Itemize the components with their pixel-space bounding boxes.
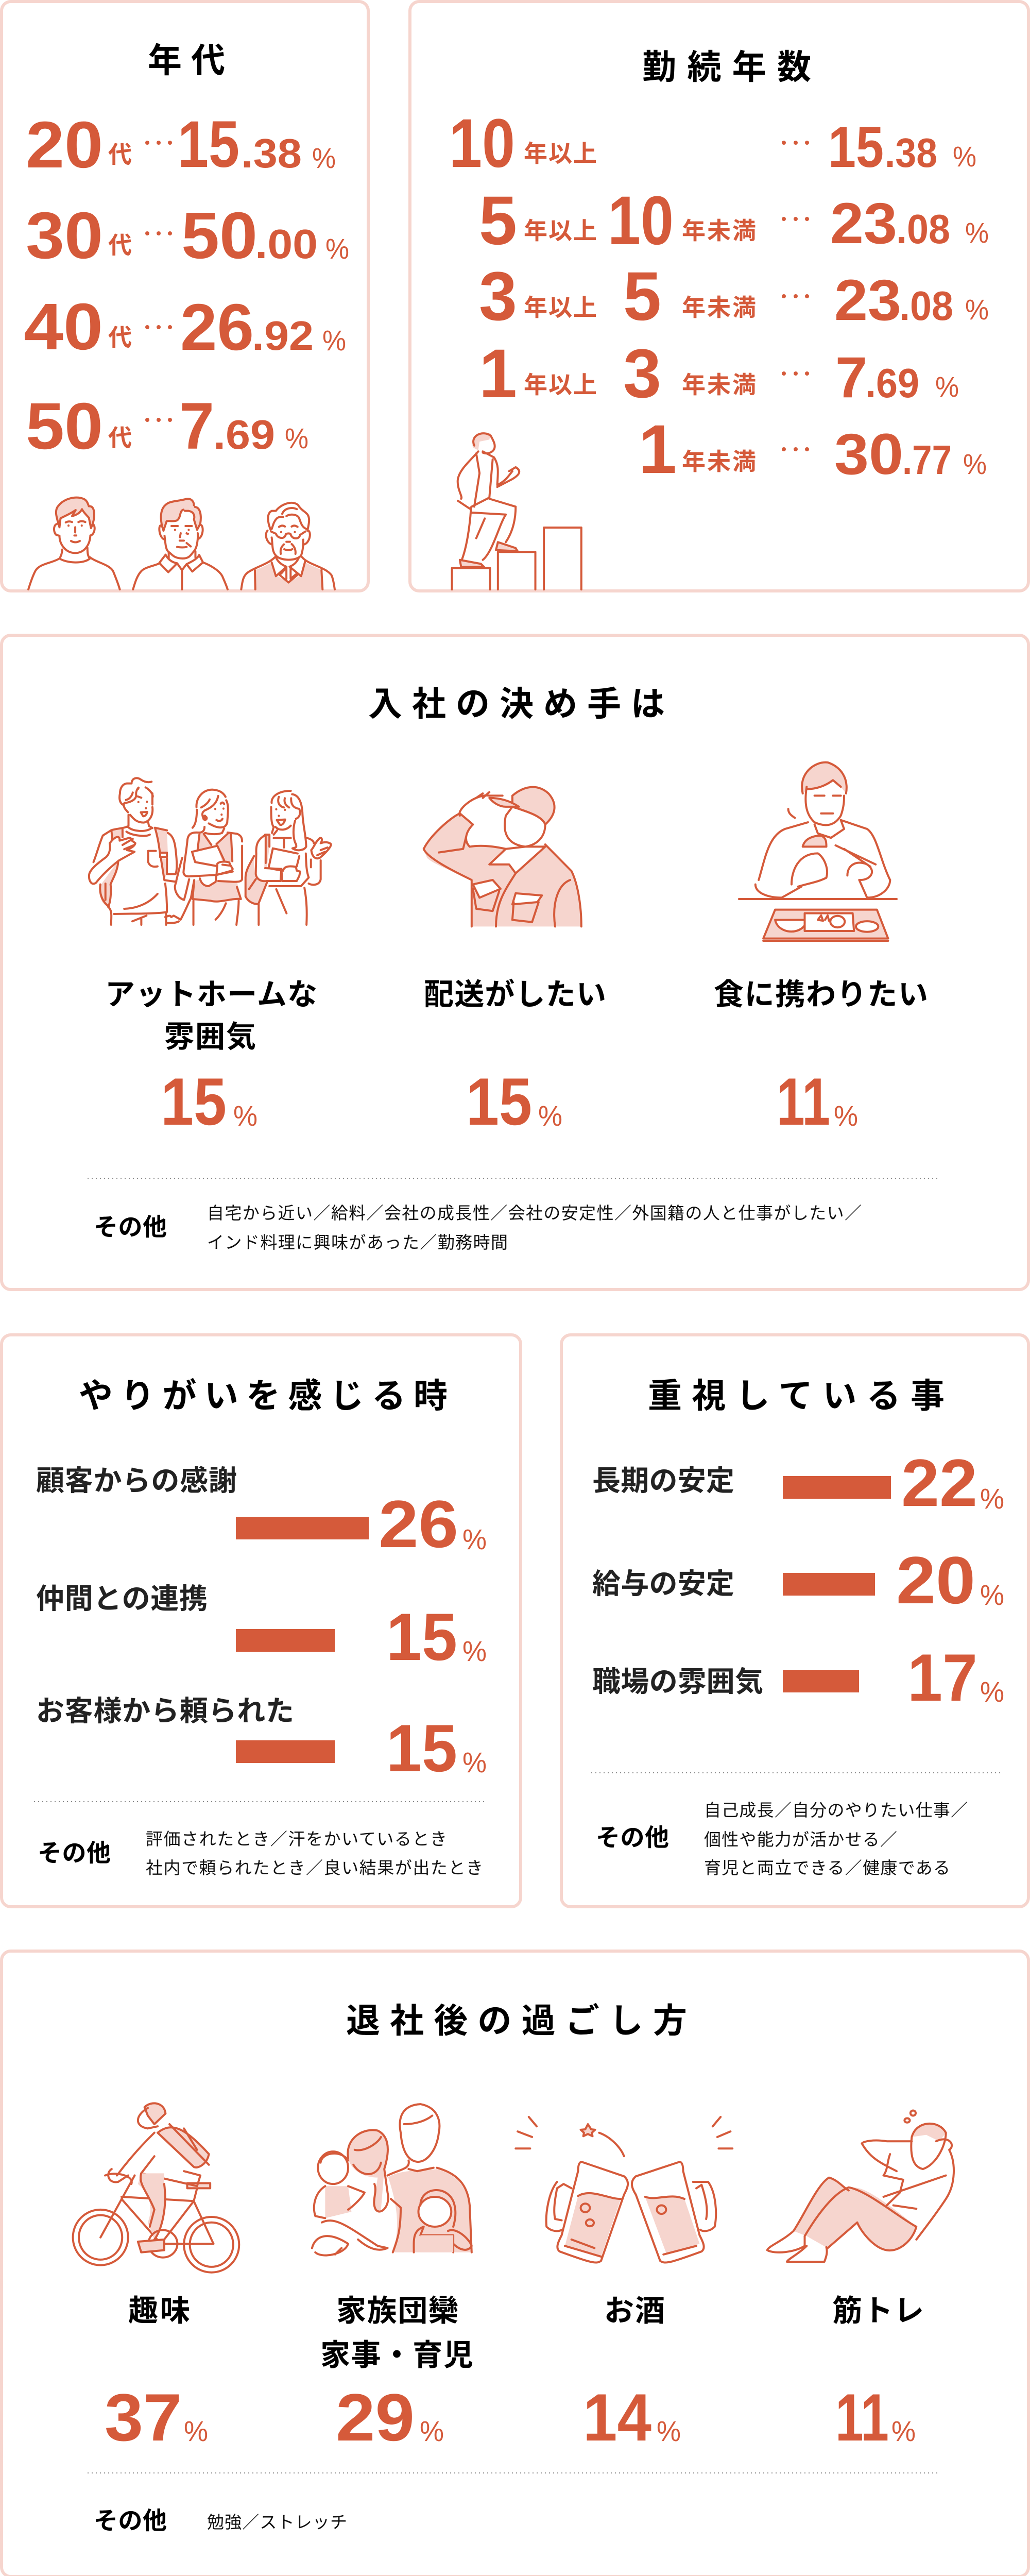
row: 5 to 10 years: 5 [479,182,517,259]
row: 20s: 代 [108,141,132,168]
icon: three coworkers [89,778,331,925]
row: 1 to 3 years: 1 [479,335,517,412]
label: drinking: お酒 [604,2294,665,2328]
heading: rewarding moments: やりがいを感じる時 [79,1377,448,1415]
row: long term stability: 22 [901,1445,977,1520]
others: after work: その他 [94,2507,167,2534]
row: under 1 year: 30 [834,422,903,486]
row: 10 years or more: % [953,140,976,173]
row: workplace atmosphere: 17 [907,1640,977,1715]
row: 10 years or more: 10 [449,105,515,182]
row: long term stability: % [980,1482,1004,1515]
others: deciding factor: その他 [94,1213,167,1241]
row: 3 to 5 years: .08 [899,283,953,329]
row: 10 years or more: 15 [828,115,884,179]
row: teamwork: 仲間との連携 [36,1583,208,1615]
row: long term stability: 長期の安定 [592,1465,734,1497]
others: priorities: 自己成長／自分のやりたい仕事／ [704,1801,968,1820]
row: relied on by customers [36,1695,487,1786]
stat: 14%: 14 [583,2380,651,2455]
row: 5 to 10 years: % [965,216,989,249]
row: thanks from customers [36,1465,487,1562]
row: 5 to 10 years: .08 [896,206,950,252]
row: 3 to 5 years: % [965,293,989,326]
label: delivery: 配送がしたい [424,978,606,1011]
icon: delivery worker [424,787,581,926]
row: 50s: 代 [108,425,132,451]
others: deciding factor: 自宅から近い／給料／会社の成長性／会社の安定性／外国籍の人と仕事がしたい／ [207,1204,862,1223]
heading: after work: 退社後の過ごし方 [346,2002,687,2040]
row: 20s: % [312,142,336,174]
stat: 15%: 15 [161,1064,227,1139]
row: relied on by customers: % [462,1746,487,1778]
row: 10 years or more: 年以上 [524,140,597,167]
others: after work [94,2507,347,2534]
row: under 1 year: 1 [639,411,677,488]
others: after work: 勉強／ストレッチ [207,2513,347,2532]
row: 40s [24,290,346,364]
label: family and housework [320,2294,473,2372]
row: 30s [26,199,349,273]
others: rewarding moments: その他 [38,1839,111,1867]
row: 10 years or more: .38 [885,130,937,176]
others: deciding factor: インド料理に興味があった／勤務時間 [207,1233,508,1252]
row: 50s: % [285,422,308,454]
panel: after work [2,1951,1028,2576]
row: 1 to 3 years: 3 [623,335,661,412]
row: teamwork: 15 [386,1599,457,1674]
row: 20s: 20 [26,108,103,182]
row: workplace atmosphere [592,1640,1004,1715]
icon: man climbing steps [452,432,581,589]
row: 30s: 30 [26,199,103,273]
row: under 1 year [639,411,987,488]
panel: age [2,2,368,591]
row: 5 to 10 years: 年未満 [682,217,756,244]
row: thanks from customers: % [462,1523,487,1555]
others: priorities: その他 [596,1824,669,1851]
panel: rewarding moments [2,1335,521,1907]
row: 3 to 5 years: 3 [479,258,517,335]
row: thanks from customers: 顧客からの感謝 [36,1465,237,1497]
label: strength training: 筋トレ [832,2294,924,2328]
row: workplace atmosphere: % [980,1675,1004,1708]
stat: 11%: % [891,2415,916,2447]
row: 5 to 10 years: 年以上 [524,217,597,244]
row: relied on by customers: お客様から頼られた [36,1695,294,1727]
stat: 15%: % [233,1099,258,1132]
stat: 29%: 29 [336,2380,415,2455]
stat: 14%: % [657,2415,681,2447]
row: under 1 year: 年未満 [682,448,756,475]
row: long term stability [592,1445,1004,1520]
row: 50s: .69 [213,412,275,457]
row: 1 to 3 years: 年未満 [682,371,756,398]
heading: tenure: 勤続年数 [642,48,811,86]
stat: 11%: 11 [835,2380,889,2455]
row: 50s: 7 [179,389,214,463]
row: 1 to 3 years [479,335,959,412]
others: rewarding moments: 社内で頼られたとき／良い結果が出たとき [146,1858,483,1877]
stat: 29%: % [420,2415,444,2447]
icon: beer toast [516,2117,732,2263]
stat: 11%: % [834,1099,858,1132]
row: 30s: 50 [181,199,258,273]
stat: 15%: 15 [466,1064,532,1139]
row: 50s [26,389,308,463]
row: salary stability [592,1543,1004,1618]
row: 3 to 5 years: 23 [834,268,901,332]
stat: 37%: 37 [105,2380,182,2455]
row: under 1 year: % [963,448,987,480]
row: 5 to 10 years: 23 [830,191,897,256]
row: 5 to 10 years [479,182,989,259]
row: 20s: .38 [241,130,302,176]
label: hobby: 趣味 [128,2294,190,2328]
label: at-home atmosphere: アットホームな [105,978,317,1011]
row: 1 to 3 years: % [935,370,959,403]
row: 1 to 3 years: 年以上 [524,371,597,398]
panel: deciding factor [2,635,1028,1290]
row: 40s: % [322,324,346,357]
row: 20s: 15 [178,108,239,181]
row: 3 to 5 years: 年未満 [682,294,756,321]
heading: deciding factor: 入社の決め手は [368,685,665,723]
stat: 37%: % [184,2415,208,2447]
row: salary stability: 20 [896,1543,975,1618]
others: rewarding moments: 評価されたとき／汗をかいているとき [146,1829,447,1849]
row: under 1 year: .77 [902,437,952,483]
label: family and housework: 家族団欒 [336,2294,458,2328]
stat: 11%: 11 [777,1064,830,1139]
heading: age: 年代 [148,41,225,79]
row: 40s: 代 [108,324,132,351]
panel: tenure [410,2,1028,591]
label: family and housework: 家事・育児 [320,2338,473,2372]
icon: family [312,2104,472,2256]
row: workplace atmosphere: 職場の雰囲気 [592,1666,763,1698]
row: teamwork [36,1583,487,1674]
row: 10 years or more [449,105,976,182]
row: 40s: 26 [180,291,254,364]
row: salary stability: 給与の安定 [592,1568,734,1600]
row: 3 to 5 years: 5 [623,258,661,335]
row: 5 to 10 years: 10 [608,182,674,259]
row: 40s: 40 [24,290,103,364]
label: at-home atmosphere [105,978,317,1054]
icon: cyclist [73,2103,239,2273]
icon: man eating [739,762,897,941]
row: 1 to 3 years: .69 [865,360,919,406]
others: deciding factor [94,1204,862,1252]
row: 40s: .92 [252,313,314,359]
row: thanks from customers: 26 [379,1486,458,1562]
row: 3 to 5 years: 年以上 [524,294,597,321]
row: 50s: 50 [26,389,103,463]
stat: 15%: % [538,1099,562,1132]
row: 3 to 5 years [479,258,989,335]
row: 30s: .00 [255,221,318,267]
others: rewarding moments [38,1829,483,1877]
row: 20s [26,108,336,182]
others: priorities: 育児と両立できる／健康である [704,1858,950,1877]
others: priorities: 個性や能力が活かせる／ [704,1830,897,1849]
heading: priorities: 重視している事 [648,1377,945,1415]
icon: three generations [28,498,335,589]
label: at-home atmosphere: 雰囲気 [164,1020,256,1054]
icon: sit-ups [767,2111,954,2262]
stat: 29% [336,2380,444,2455]
row: teamwork: % [462,1635,487,1667]
row: 1 to 3 years: 7 [835,345,867,410]
row: 30s: % [325,232,349,265]
label: food: 食に携わりたい [714,978,928,1011]
row: salary stability: % [980,1579,1004,1611]
row: relied on by customers: 15 [386,1710,457,1786]
panel: priorities [561,1335,1028,1907]
row: 30s: 代 [108,232,132,259]
others: priorities [596,1801,968,1877]
